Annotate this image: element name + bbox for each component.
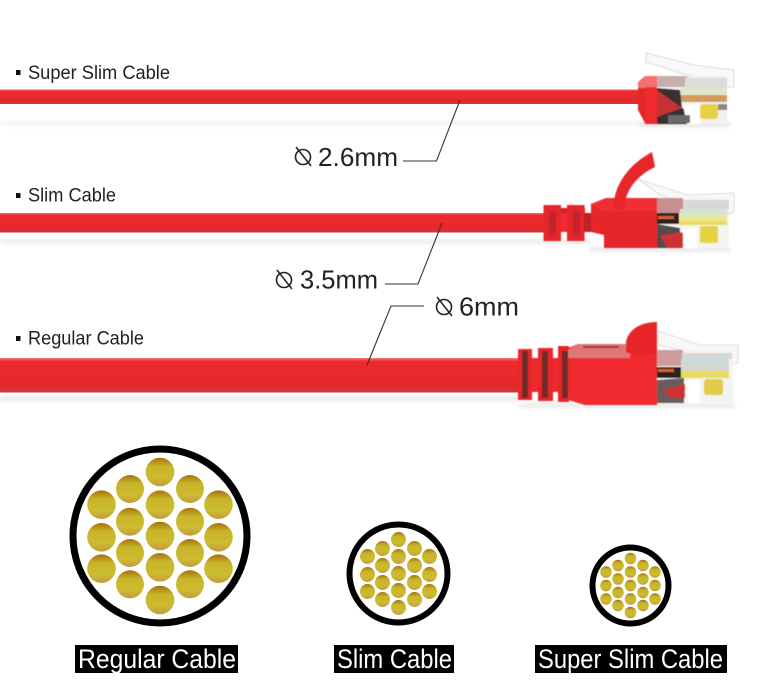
leader and dimension: 2.6mm: 2.6mm (318, 142, 398, 172)
leader and dimension: 6mm (367, 292, 519, 365)
caption: Super Slim Cable: Super Slim Cable (538, 644, 723, 674)
leader and dimension: 2.6mm (296, 100, 460, 172)
label: Slim Cable: Slim Cable (28, 186, 116, 206)
label: Regular Cable: Regular Cable (28, 328, 144, 350)
caption: Slim Cable: Slim Cable (337, 644, 452, 674)
leader and dimension: 6mm: 6mm (459, 292, 519, 322)
super slim cable with plug (0, 53, 734, 126)
caption: Regular Cable: Regular Cable (78, 644, 236, 674)
label: Super Slim Cable: Super Slim Cable (28, 63, 170, 84)
cross-section: regular cable (73, 449, 247, 623)
leader and dimension: 3.5mm (276, 223, 442, 294)
slim cable with plug (0, 152, 734, 251)
leader and dimension: 3.5mm: 3.5mm (300, 264, 378, 294)
regular cable with plug (0, 322, 738, 407)
cross-section: super slim cable (592, 548, 668, 624)
cross-section: slim cable (350, 524, 448, 622)
